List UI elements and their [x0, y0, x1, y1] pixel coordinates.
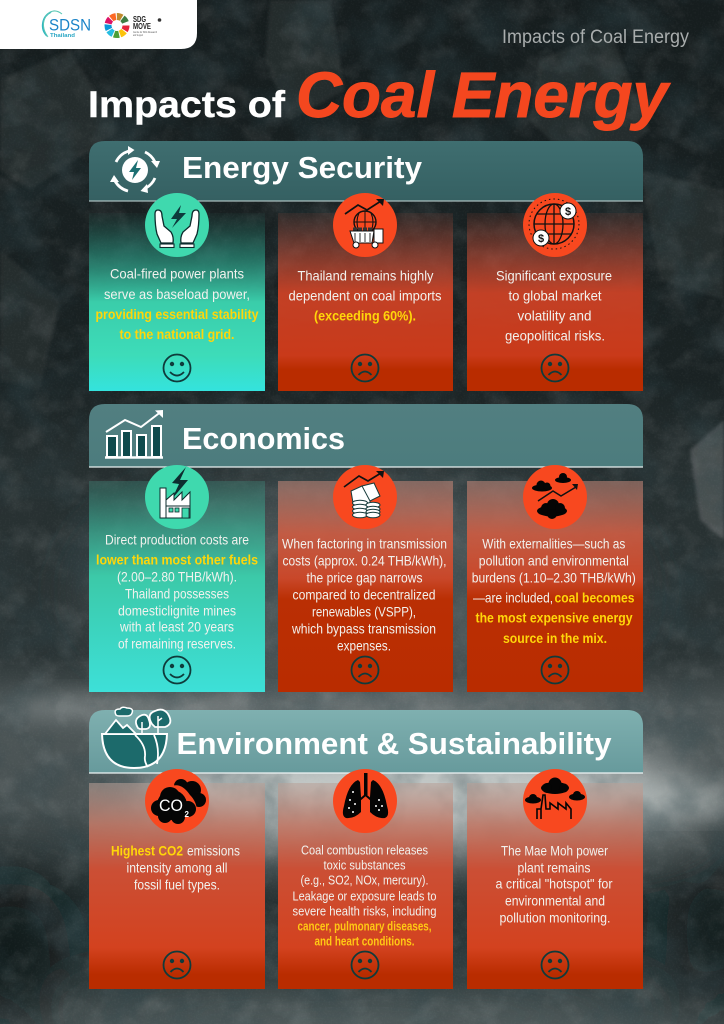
icon: CO2 cloud: CO [159, 796, 183, 815]
icon: CO2 cloud: 2 [184, 810, 190, 819]
icon: sad face [352, 354, 378, 382]
card text: Thailand remains highly [298, 268, 434, 284]
header band: Economics: Economics [182, 421, 345, 456]
card text: (exceeding 60%). [314, 308, 416, 324]
icon: happy face [164, 354, 190, 382]
card text: intensity among all [126, 860, 228, 876]
card text: pollution and environmental [479, 552, 629, 568]
section: Energy Security [89, 141, 643, 391]
card text: of remaining reserves. [118, 636, 236, 652]
card text: The Mae Moh power [501, 842, 608, 858]
card text: dependent on coal imports [288, 288, 442, 304]
card text [496, 842, 613, 926]
card text: toxic substances [324, 858, 406, 872]
icon: polluting factory [523, 769, 587, 833]
card text: cancer, pulmonary diseases, [298, 920, 432, 934]
card text: Coal-fired power plants [110, 266, 244, 282]
card text: When factoring in transmission [282, 536, 447, 552]
icon: money stacks [333, 465, 397, 529]
card text: Significant exposure [496, 268, 612, 284]
icon: earth with mountains and trees [102, 707, 170, 768]
card text: providing essential stability [96, 306, 259, 322]
page label: Impacts of Coal Energy [502, 27, 689, 48]
card text [472, 536, 636, 646]
card text: severe health risks, including [292, 904, 437, 918]
icon: sad face [164, 952, 190, 978]
header band: Environment and Sustainability: Environment & Sustainability [176, 726, 612, 761]
card text [292, 844, 437, 948]
card text: fossil fuel types. [134, 876, 220, 892]
card text: environmental and [505, 892, 605, 908]
card text: Thailand possesses [125, 586, 229, 602]
icon: sad face [542, 952, 568, 978]
logo: SDSN Thailand [43, 11, 91, 39]
header band: Economics [89, 404, 643, 467]
card text: emissions [187, 842, 240, 858]
card text [96, 266, 259, 342]
card text: and heart conditions. [314, 934, 414, 948]
icon: clouds and rising line [523, 465, 587, 529]
card text: —are included, [473, 590, 553, 606]
card text: Leakage or exposure leads to [292, 890, 437, 904]
icon: sad face [542, 354, 568, 382]
card text: plant remains [518, 860, 590, 876]
card text: With externalities—such as [482, 536, 625, 552]
card text [111, 842, 240, 892]
card text: Coal combustion releases [301, 844, 428, 858]
card text: Direct production costs are [105, 532, 249, 548]
card text: which bypass transmission [291, 620, 436, 636]
logo: SDSN Thailand: Thailand [50, 33, 75, 39]
card text: Highest CO2 [111, 842, 183, 858]
card text: lower than most other fuels [96, 552, 258, 568]
card text: coal becomes [554, 590, 635, 606]
card text: to the national grid. [120, 326, 234, 342]
icon: hands and bolt [145, 193, 209, 257]
card text: domesticlignite mines [118, 602, 236, 618]
section: Environment and Sustainability [89, 707, 643, 989]
card text: with at least 20 years [119, 618, 234, 634]
card: Mae Moh hotspot [467, 769, 643, 989]
logo: SDG Move [108, 15, 161, 37]
icon: sad face [352, 656, 378, 684]
icon: energy cycle [110, 146, 160, 193]
logo: SDSN Thailand: SDSN [49, 16, 91, 34]
card text: to global market [508, 288, 602, 304]
card text: renewables (VSPP), [312, 604, 416, 620]
icon: sad face [352, 952, 378, 978]
card: CO2 intensity [89, 769, 265, 989]
icon: sad face [542, 656, 568, 684]
logo panel [0, 0, 197, 49]
card text: burdens (1.10–2.30 THB/kWh) [472, 570, 636, 586]
title: Coal Energy [296, 59, 671, 131]
logo: SDG Move: MOVE [133, 22, 152, 31]
header band: Energy Security [89, 141, 643, 201]
logo: SDG Move: Centre for SDG Research [133, 30, 157, 34]
icon: bar chart growth [105, 410, 163, 458]
card text: a critical "hotspot" for [496, 876, 613, 892]
card text [282, 536, 447, 654]
icon: factory and bolt [145, 465, 209, 529]
card: transmission costs [278, 465, 453, 692]
icon: globe and dollars [523, 193, 587, 257]
card: market volatility [467, 193, 643, 391]
card: coal imports [278, 193, 453, 391]
card: externalities [467, 465, 643, 692]
icon: globe and dollars: $ [538, 233, 544, 245]
icon: lungs [333, 769, 397, 833]
icon: coal truck [333, 193, 397, 257]
card text: geopolitical risks. [505, 328, 605, 344]
icon: globe and dollars: $ [565, 206, 571, 218]
card text [96, 532, 258, 652]
card text: (e.g., SO2, NOx, mercury). [300, 874, 428, 888]
title [88, 59, 671, 131]
card: production costs [89, 465, 265, 692]
card text: source in the mix. [503, 630, 607, 646]
card text [288, 268, 442, 324]
title: Impacts of [88, 84, 286, 125]
card: toxic substances [278, 769, 453, 989]
logo: SDG Move: and Support [133, 33, 143, 37]
card text: pollution monitoring. [500, 910, 610, 926]
icon: happy face [164, 656, 190, 684]
card text: compared to decentralized [292, 586, 436, 602]
card text: costs (approx. 0.24 THB/kWh), [282, 552, 446, 568]
icon: CO2 cloud [145, 769, 209, 833]
header band: Environment and Sustainability [89, 710, 643, 773]
card: baseload stability [89, 193, 265, 391]
logo: SDG Move: SDG [133, 15, 146, 24]
section: Economics [89, 404, 643, 692]
header band: Energy Security: Energy Security [182, 150, 423, 185]
card text: the price gap narrows [306, 570, 422, 586]
card text: volatility and [518, 308, 592, 324]
card text [496, 268, 612, 344]
card text: serve as baseload power, [104, 286, 250, 302]
card text: (2.00–2.80 THB/kWh). [117, 568, 237, 584]
card text: expenses. [337, 638, 391, 654]
card text: the most expensive energy [476, 610, 633, 626]
